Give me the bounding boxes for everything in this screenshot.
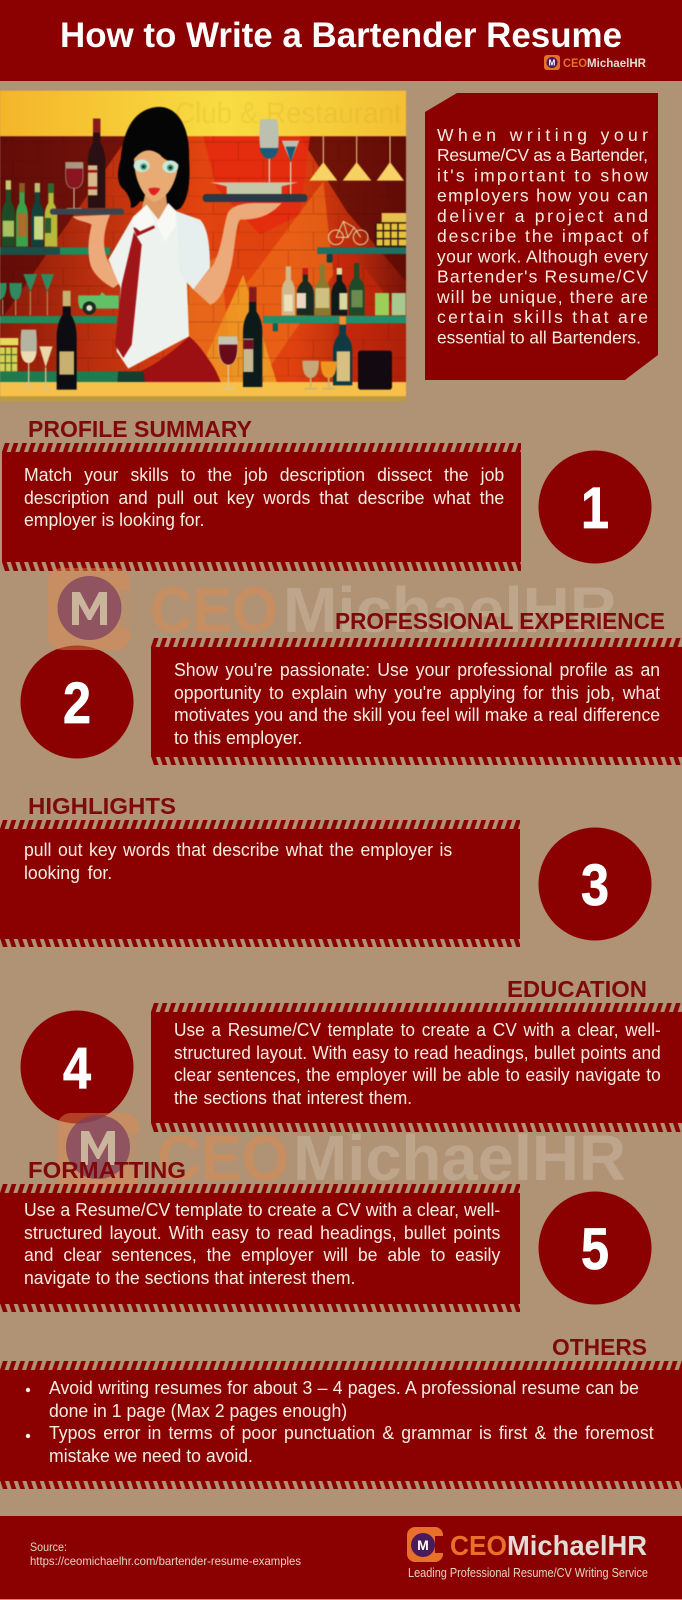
panel: intro text: certain skills that are (437, 307, 648, 327)
faint wall sign: Club & Restaurant (175, 97, 402, 130)
panel: intro text: essential to all Bartenders. (437, 328, 641, 348)
panel: intro text: employers how you can (437, 186, 648, 206)
number circle 1: 1 (581, 476, 609, 541)
header logo: CEO (563, 58, 587, 70)
apron (140, 336, 220, 382)
face (134, 146, 179, 202)
footer logo (407, 1527, 648, 1580)
shirt (108, 203, 197, 369)
panel: intro text: Bartender's Resume/CV (437, 267, 648, 287)
number circle 1 (538, 450, 652, 564)
panel: profile summary: employer is looking for. (24, 510, 204, 530)
panel: formatting: navigate to the sections that interest them. (24, 1268, 355, 1288)
panel: intro text: describe the impact of (437, 226, 648, 246)
number circle 5 (538, 1192, 652, 1304)
panel: others: done in 1 page (Max 2 pages enough) (49, 1401, 347, 1421)
footer logo: CEO (450, 1530, 507, 1561)
footer logo: MichaelHR (507, 1530, 647, 1561)
upper wall band (0, 91, 406, 136)
panel: intro text (425, 93, 658, 380)
header banner (0, 0, 682, 81)
watermark: CEOMichaelHR upper: MichaelHR (283, 574, 617, 646)
panel: education: structured layout. With easy to read headings, bullet points and (174, 1043, 661, 1063)
panel: intro text: When writing your (437, 125, 648, 145)
arms (73, 215, 120, 288)
number circle 3: 3 (581, 853, 609, 918)
number circle 4 (20, 1010, 134, 1124)
right tray with plate and glasses (203, 119, 307, 202)
panel: formatting: structured layout. With easy to read headings, bullet points (24, 1223, 500, 1243)
footer (0, 1516, 682, 1599)
title: How to Write a Bartender Resume (60, 16, 622, 55)
basket on counter left (0, 338, 18, 371)
green glasses (0, 274, 54, 315)
footer logo: M (417, 1537, 429, 1553)
shelves (0, 247, 406, 382)
header logo: M (549, 58, 556, 68)
panel: profile summary: Match your skills to the job description dissect the job (24, 465, 504, 485)
number circle 5: 5 (581, 1217, 609, 1282)
panel: intro text: deliver a project and (437, 206, 648, 226)
panel: intro text: will be unique, there are (436, 287, 648, 307)
lamps (309, 136, 404, 181)
panel: formatting: and clear sentences, the employer will be able to easily (24, 1245, 500, 1265)
watermark: CEOMichaelHR lower: CEO (157, 1122, 289, 1194)
panel: profile summary (2, 443, 521, 571)
panel: professional experience: to this employer. (174, 728, 302, 748)
header logo (544, 55, 647, 70)
waitress (73, 107, 282, 382)
counter (0, 382, 406, 401)
watermark: CEOMichaelHR lower: MichaelHR (293, 1122, 626, 1194)
panel: professional experience (151, 638, 682, 765)
number circle 2 (20, 646, 134, 758)
source text: Source: (30, 1540, 67, 1554)
panel: highlights: pull out key words that describe what the employer is (24, 840, 452, 860)
panel: others: Typos error in terms of poor punctuation & grammar is first & the foremost (49, 1423, 654, 1443)
panel: professional experience: motivates you and the skill you feel will make a real difference (174, 705, 660, 725)
left tray with wine and bottle (50, 119, 124, 215)
panel: profile summary: description and pull out key words that describe what the (24, 488, 504, 508)
panel: intro text: it's important to show (437, 166, 648, 186)
neck (140, 195, 168, 228)
panel: others (0, 1361, 682, 1489)
panel: others: mistake we need to avoid. (49, 1446, 253, 1466)
source text (30, 1540, 301, 1568)
panel: professional experience: Show you're passionate: Use your professional profile as an (174, 660, 660, 680)
number circle 3 (538, 828, 652, 940)
hair back (118, 107, 190, 210)
bottles left shelf (2, 180, 57, 247)
panel: education: clear sentences, the employer will be able to easily navigate to (174, 1065, 661, 1085)
panel: highlights (0, 820, 520, 947)
panel: intro text: your work. Although every (437, 246, 648, 266)
toy car (78, 292, 119, 315)
watermark: CEOMichaelHR upper (48, 568, 617, 650)
panel: formatting (0, 1184, 520, 1312)
panel: professional experience: opportunity to explain why you're applying for this job, what (174, 683, 660, 703)
panel: intro text: Resume/CV as a Bartender, (437, 145, 648, 165)
brick wall and light beams (0, 136, 406, 382)
tie (133, 225, 155, 236)
bicycle and basket (329, 213, 406, 246)
watermark: CEOMichaelHR lower (57, 1113, 626, 1194)
front glasses and bottles left (20, 291, 77, 390)
header logo: MichaelHR (587, 58, 647, 70)
illustration: bartender waitress holding trays in a bar (0, 90, 407, 402)
front glasses and bottles right (218, 287, 392, 390)
number circle 4: 4 (63, 1036, 91, 1101)
panel: education (151, 1003, 682, 1132)
watermark: CEOMichaelHR upper: CEO (150, 574, 278, 646)
panel: others: Avoid writing resumes for about 3 – 4 pages. A professional resume can be (49, 1378, 639, 1398)
panel: education: Use a Resume/CV template to create a CV with a clear, well- (174, 1020, 661, 1040)
panel: highlights: looking for. (24, 863, 112, 883)
bottles right shelf (282, 263, 406, 315)
panel: formatting: Use a Resume/CV template to create a CV with a clear, well- (24, 1200, 500, 1220)
panel: education: the sections that interest them. (174, 1088, 412, 1108)
number circle 2: 2 (63, 671, 91, 736)
